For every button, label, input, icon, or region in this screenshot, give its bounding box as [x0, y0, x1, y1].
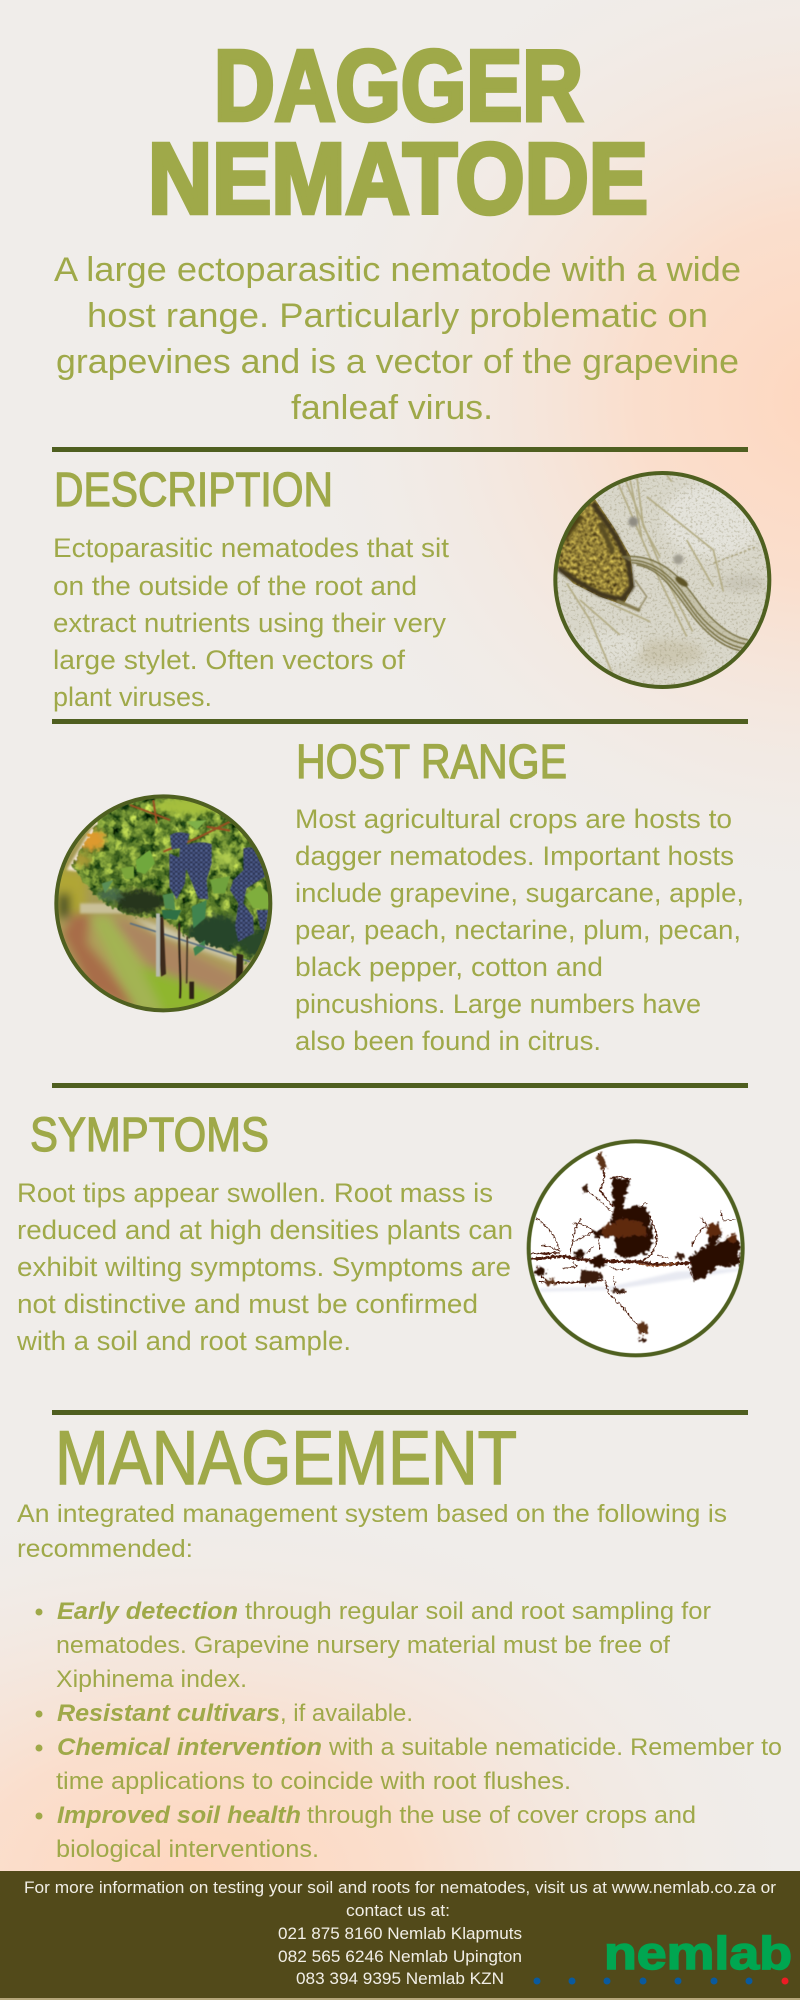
description text: on the outside of the root and: [53, 571, 417, 601]
heading: description: DESCRIPTION: [54, 464, 333, 517]
host range text: black pepper, cotton and: [295, 952, 603, 982]
symptoms text: exhibit wilting symptoms. Symptoms are: [17, 1252, 511, 1282]
heading: symptoms: SYMPTOMS: [30, 1109, 269, 1162]
host range text: include grapevine, sugarcane, apple,: [295, 878, 744, 908]
description text: extract nutrients using their very: [53, 608, 447, 638]
symptoms text: reduced and at high densities plants can: [17, 1215, 513, 1245]
bullet: chemical intervention: Chemical intervention: [57, 1734, 322, 1761]
bullet: resistant cultivars: [36, 1700, 413, 1727]
management intro: An integrated management system based on the following is: [17, 1500, 727, 1528]
contact text: 083 394 9395 Nemlab KZN: [296, 1969, 504, 1988]
panel: symptoms: [16, 1109, 750, 1363]
host range text: [295, 804, 744, 1056]
logo: nemlab: nemlab: [604, 1927, 792, 1979]
heading: host range: HOST RANGE: [296, 736, 567, 789]
management intro: recommended:: [17, 1535, 193, 1563]
contact text: contact us at:: [346, 1901, 450, 1920]
title: [148, 30, 648, 235]
symptoms text: not distinctive and must be confirmed: [17, 1289, 478, 1319]
bullet: chemical intervention: time applications to coincide with root flushes.: [56, 1768, 571, 1795]
bullet: improved soil health: through the use of cover crops and: [307, 1802, 696, 1829]
bullet: improved soil health: [36, 1802, 696, 1863]
panel: host range: [53, 736, 744, 1056]
panel: management: [17, 1416, 782, 1863]
contact text: [24, 1878, 776, 1988]
description text: large stylet. Often vectors of: [53, 645, 406, 675]
symptoms text: [16, 1178, 513, 1356]
title: NEMATODE: [148, 123, 648, 235]
intro text: grapevines and is a vector of the grapevine: [56, 343, 739, 381]
host range text: Most agricultural crops are hosts to: [295, 804, 732, 834]
photo: vineyard with grapes: [53, 793, 277, 1013]
description text: Ectoparasitic nematodes that sit: [53, 533, 450, 563]
bullet: resistant cultivars: , if available.: [280, 1700, 413, 1727]
intro text: fanleaf virus.: [291, 389, 493, 427]
bullet: chemical intervention: [36, 1734, 782, 1795]
photo: infected roots: [523, 1137, 750, 1363]
bullet: early detection: Xiphinema index.: [56, 1666, 247, 1693]
panel: description: [53, 464, 772, 712]
contact text: For more information on testing your soil and roots for nematodes, visit us at www.nemlab.co.za or: [24, 1878, 776, 1897]
logo: nemlab: [534, 1927, 792, 1984]
symptoms text: with a soil and root sample.: [16, 1326, 351, 1356]
symptoms text: Root tips appear swollen. Root mass is: [17, 1178, 493, 1208]
host range text: also been found in citrus.: [295, 1026, 601, 1056]
bullet: early detection: Early detection: [57, 1598, 238, 1625]
description text: plant viruses.: [53, 682, 212, 712]
bullet: early detection: through regular soil and root sampling for: [245, 1598, 711, 1625]
description text: [53, 533, 450, 712]
bullet: improved soil health: Improved soil health: [57, 1802, 301, 1829]
bullet: early detection: nematodes. Grapevine nursery material must be free of: [56, 1632, 670, 1659]
bullet: resistant cultivars: Resistant cultivars: [57, 1700, 280, 1727]
management intro: [17, 1500, 727, 1563]
heading: management: MANAGEMENT: [55, 1416, 517, 1501]
intro text: A large ectoparasitic nematode with a wide: [54, 251, 741, 289]
footer: [0, 1871, 800, 2000]
title: DAGGER: [214, 30, 583, 142]
intro text: [54, 251, 741, 427]
host range text: dagger nematodes. Important hosts: [295, 841, 734, 871]
host range text: pincushions. Large numbers have: [295, 989, 701, 1019]
contact text: 082 565 6246 Nemlab Upington: [278, 1947, 522, 1966]
intro text: host range. Particularly problematic on: [87, 297, 708, 335]
bullet: early detection: [36, 1598, 711, 1693]
host range text: pear, peach, nectarine, plum, pecan,: [295, 915, 741, 945]
bullet: improved soil health: biological interventions.: [56, 1836, 319, 1863]
photo: nematode under microscope: [550, 472, 772, 688]
contact text: 021 875 8160 Nemlab Klapmuts: [278, 1924, 522, 1943]
bullet: chemical intervention: with a suitable nematicide. Remember to: [328, 1734, 782, 1761]
